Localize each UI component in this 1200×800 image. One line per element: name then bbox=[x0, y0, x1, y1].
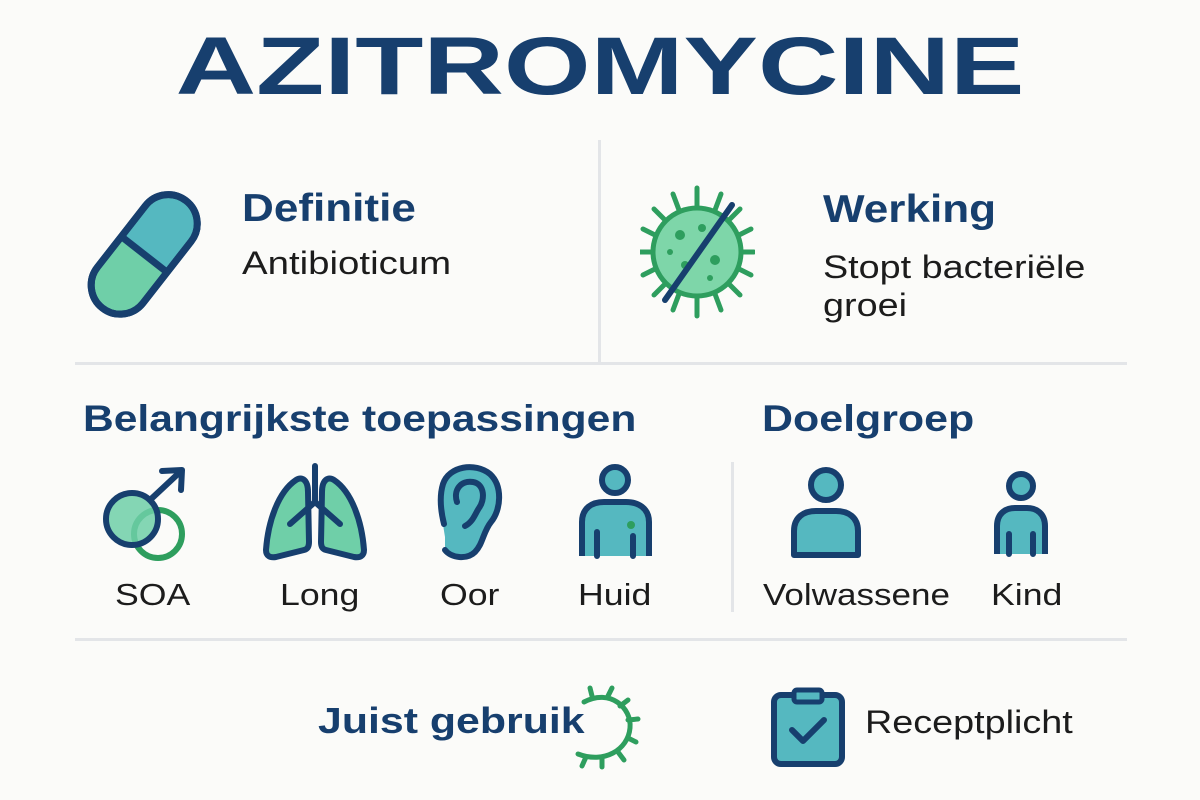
icon: gender symbols bbox=[103, 467, 185, 561]
label: SOA: SOA bbox=[115, 577, 190, 612]
heading: Werking: Werking bbox=[823, 188, 996, 231]
text: Antibioticum: Antibioticum bbox=[242, 245, 451, 281]
heading: Belangrijkste toepassingen: Belangrijkste toepassingen bbox=[83, 398, 636, 439]
icon: partial bacterium arc bbox=[576, 686, 640, 770]
text: Stopt bacteriële groei bbox=[823, 249, 1085, 323]
icon: pill bbox=[88, 191, 201, 318]
label: Huid: Huid bbox=[578, 577, 651, 612]
item: Volwassene bbox=[763, 467, 950, 612]
label: Volwassene: Volwassene bbox=[763, 577, 950, 612]
item: Long bbox=[263, 463, 367, 612]
icon: clipboard check bbox=[771, 688, 845, 767]
label: Long: Long bbox=[280, 577, 359, 612]
icon: adult bbox=[791, 467, 861, 558]
icon: child bbox=[994, 471, 1048, 557]
icon: lungs bbox=[263, 463, 367, 560]
text: Stopt bacteriële groei: groei bbox=[823, 287, 907, 323]
item: Huid bbox=[578, 464, 652, 612]
footer: receptplicht bbox=[771, 688, 1073, 767]
heading: Juist gebruik: Juist gebruik bbox=[318, 700, 585, 741]
title: AZITROMYCINE bbox=[176, 21, 1024, 112]
label: Oor: Oor bbox=[440, 577, 499, 612]
heading: Definitie: Definitie bbox=[242, 187, 416, 230]
panel: definitie bbox=[88, 187, 451, 318]
panel: werking bbox=[640, 186, 1085, 323]
item: Oor bbox=[438, 464, 502, 612]
item: SOA bbox=[103, 467, 190, 612]
icon: crossed bacterium bbox=[640, 186, 755, 318]
text: Receptplicht: Receptplicht bbox=[865, 704, 1073, 740]
text: Stopt bacteriële groei: Stopt bacteriële bbox=[823, 249, 1085, 285]
heading: Doelgroep: Doelgroep bbox=[762, 398, 974, 439]
item: Kind bbox=[991, 471, 1062, 612]
icon: ear bbox=[438, 464, 502, 560]
icon: person with skin spot bbox=[579, 464, 652, 559]
label: Kind: Kind bbox=[991, 577, 1062, 612]
footer: juist gebruik bbox=[318, 686, 640, 770]
